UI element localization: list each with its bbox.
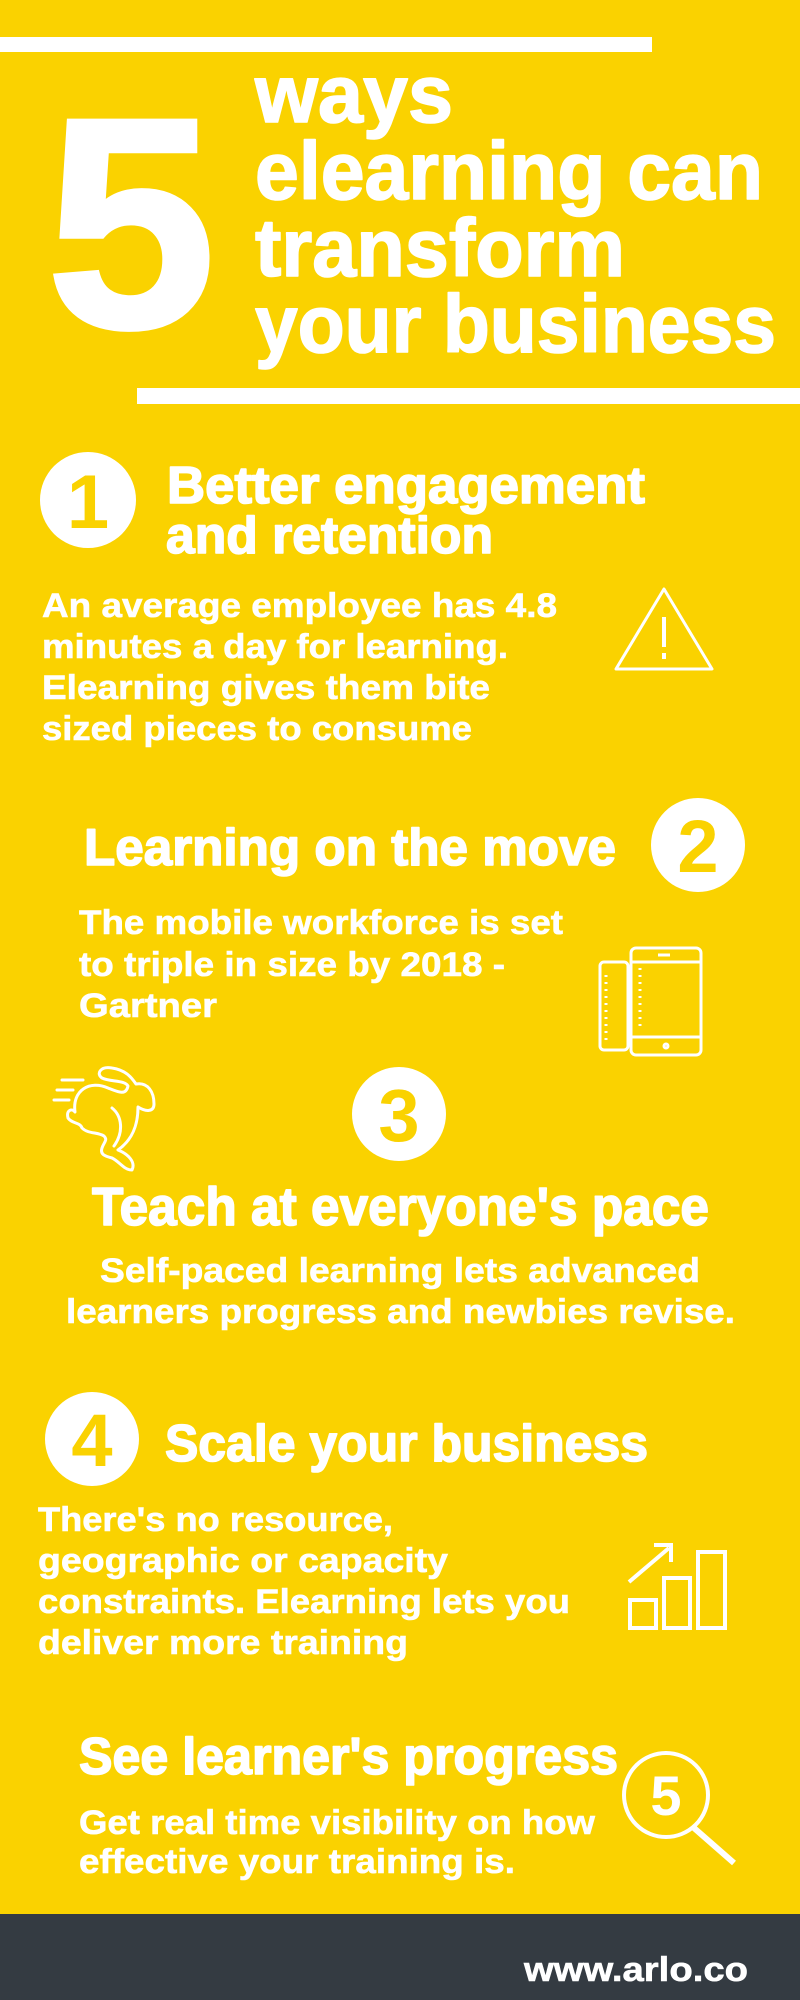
icon: warning triangle [616,589,712,669]
icon: growth chart [629,1545,725,1628]
number badge 1: 1 [67,460,109,545]
body 3: learners progress and newbies revise. [66,1293,735,1331]
title [254,49,776,370]
footer url: www.arlo.co [523,1951,748,1989]
number badge 2 [651,798,745,892]
body 4: deliver more training [38,1624,408,1662]
section 1 [40,452,712,748]
body 1 [42,587,557,748]
body 2: The mobile workforce is set [79,904,563,942]
section 3 [54,1067,735,1331]
heading 4: Scale your business [165,1415,648,1473]
body 2 [79,904,563,1025]
body 1: An average employee has 4.8 [42,587,557,625]
body 5 [79,1804,596,1881]
body 1: minutes a day for learning. [42,628,508,666]
number badge 2: 2 [677,805,719,888]
number badge 4 [45,1392,139,1486]
number badge 3: 3 [378,1074,420,1157]
body 5: effective your training is. [79,1843,515,1881]
heading 3: Teach at everyone's pace [92,1177,709,1237]
section 4 [38,1392,725,1662]
icon: magnifier with 5 [624,1753,734,1863]
body 2: to triple in size by 2018 - [79,946,505,984]
section 2 [79,798,745,1055]
body 3 [66,1252,735,1331]
number badge 3 [352,1067,446,1161]
heading 1: and retention [166,507,493,565]
title: your business [255,279,776,370]
body 1: sized pieces to consume [42,710,472,748]
icon: mobile devices [600,948,701,1055]
body 3: Self-paced learning lets advanced [100,1252,700,1290]
heading 2: Learning on the move [84,819,616,877]
heading 5: See learner's progress [79,1728,618,1786]
body 4 [38,1501,570,1662]
title: transform [255,203,625,294]
body 1: Elearning gives them bite [42,669,490,707]
bottom title bar [137,388,800,404]
top bar [0,37,652,52]
heading 1: Better engagement [167,457,645,515]
footer [0,1914,800,2000]
number badge 4: 4 [71,1399,113,1482]
section 5 [79,1728,734,1881]
icon: magnifier with 5: 5 [650,1764,682,1827]
icon: rabbit [54,1068,154,1170]
number badge 1 [40,452,136,548]
body 4: constraints. Elearning lets you [38,1583,570,1621]
title: ways [254,49,453,140]
heading 1 [166,457,645,565]
big number 5: 5 [46,55,216,391]
title: elearning can [255,126,763,217]
body 2: Gartner [79,987,217,1025]
body 4: There's no resource, [38,1501,393,1539]
body 5: Get real time visibility on how [79,1804,596,1842]
body 4: geographic or capacity [38,1542,448,1580]
